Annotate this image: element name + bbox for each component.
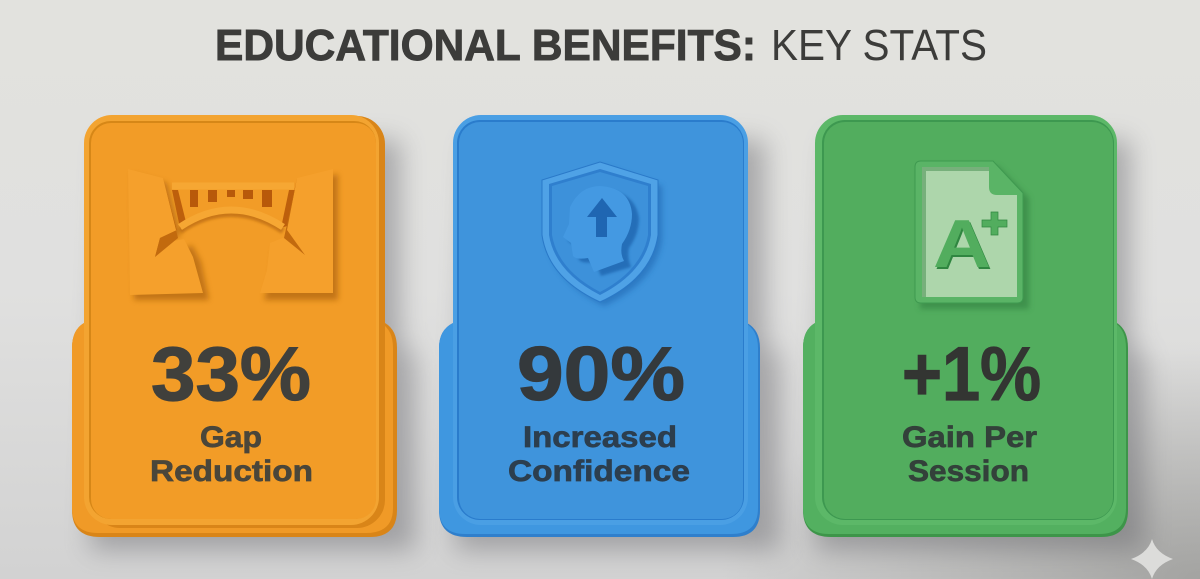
panel: gap reduction: [72, 115, 415, 550]
label: gain per session: Gain Per: [902, 421, 1037, 454]
grade text: A: [933, 206, 991, 282]
label: gap reduction: Gap: [200, 421, 262, 454]
grade text: A: [934, 208, 992, 284]
stat: +1%: +1%: [902, 332, 1041, 417]
icon: bridge over gap: [128, 169, 338, 300]
stat: 90%: 90%: [517, 332, 685, 417]
label: increased confidence: Confidence: [508, 455, 690, 488]
label: gap reduction: [150, 421, 313, 488]
icon: shield with head and up arrow: [542, 162, 662, 306]
title: KEY STATS: [771, 21, 987, 70]
panel: increased confidence: [439, 115, 780, 550]
label: gain per session: Session: [908, 455, 1029, 488]
icon: document with A+ grade: [915, 161, 1029, 309]
label: increased confidence: [508, 421, 690, 488]
title: EDUCATIONAL BENEFITS:: [215, 21, 756, 70]
label: gap reduction: Reduction: [150, 455, 313, 488]
label: increased confidence: Increased: [523, 421, 677, 454]
panel: gain per session: [803, 115, 1145, 550]
grade text: [933, 206, 1007, 284]
stat: 33%: 33%: [151, 332, 311, 417]
label: gain per session: [902, 421, 1037, 488]
icon: sparkle watermark: [1131, 539, 1173, 579]
